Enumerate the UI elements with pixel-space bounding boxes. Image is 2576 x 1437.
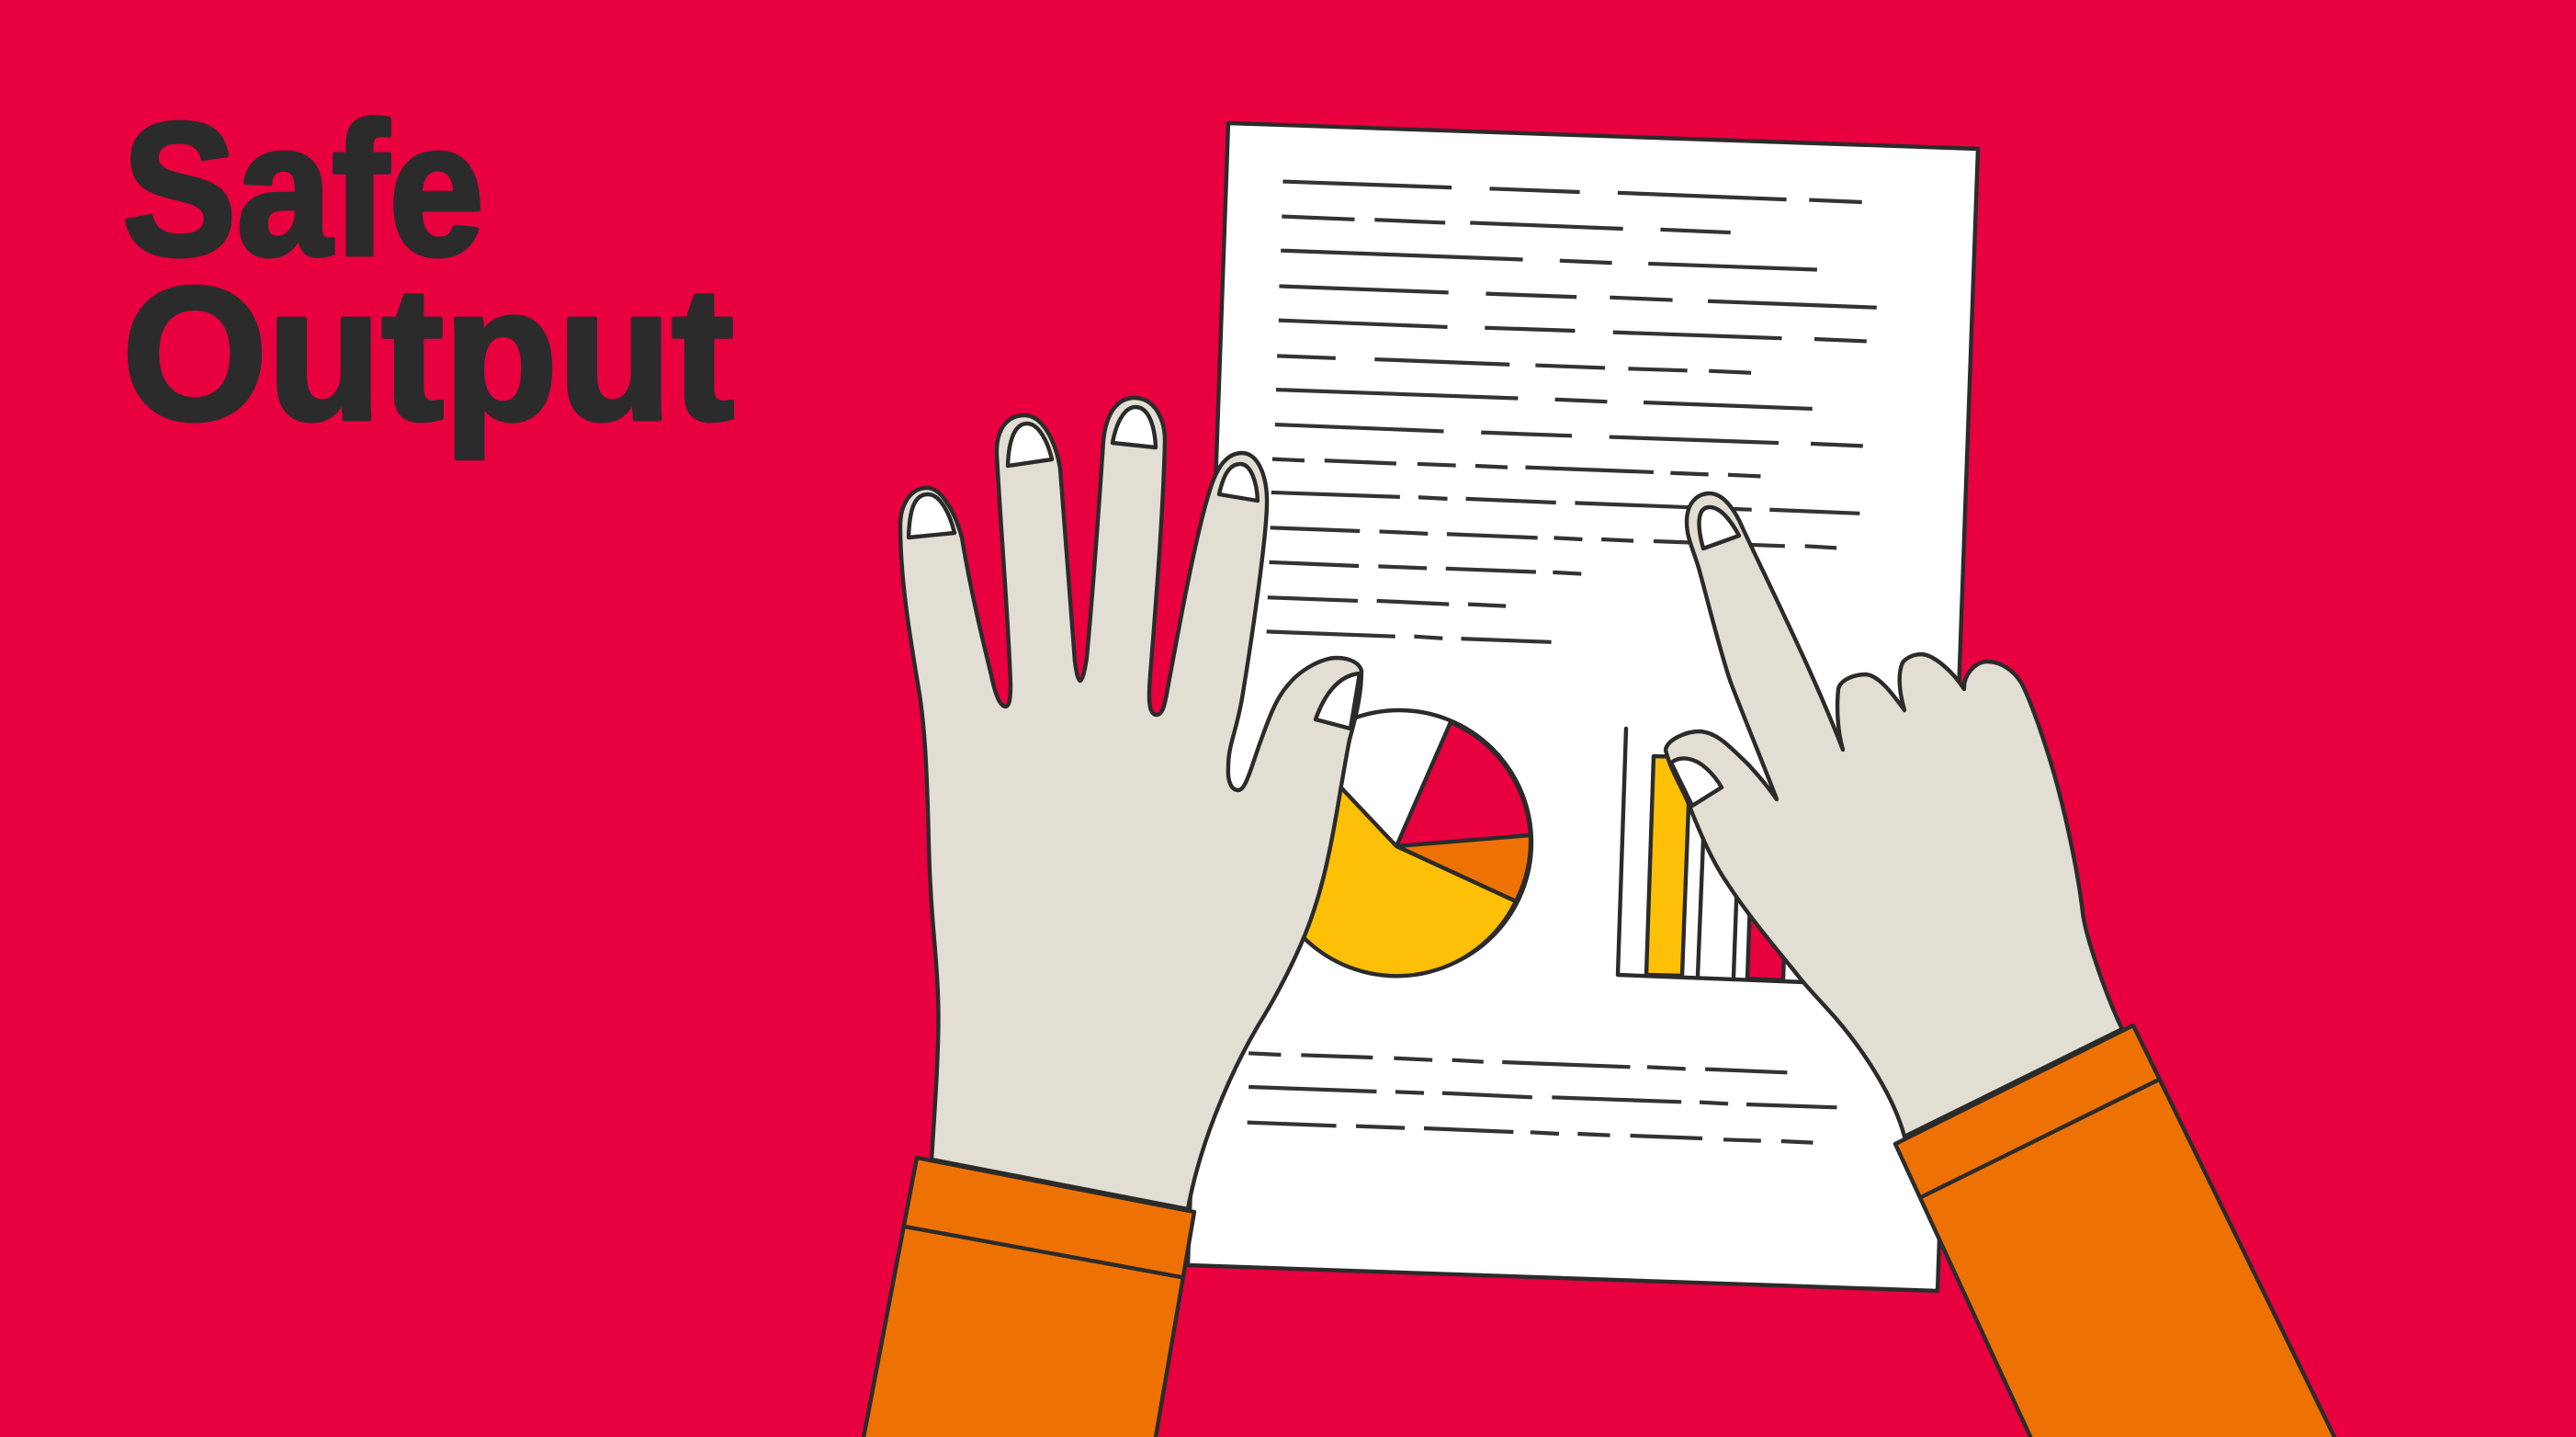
bar chart <box>1618 729 1805 982</box>
title: Output <box>122 248 734 459</box>
upper text lines <box>1267 182 1877 642</box>
nail: ring <box>1008 424 1052 466</box>
nail: right thumb <box>1671 758 1722 806</box>
left hand <box>900 398 1361 1209</box>
right hand <box>1666 493 2122 1137</box>
nail: pointing finger <box>1700 507 1739 549</box>
right sleeve <box>1895 1025 2337 1437</box>
nail: middle <box>1113 407 1156 447</box>
paper sheet <box>1188 123 1978 1291</box>
lower text lines <box>1248 1053 1836 1143</box>
nail: index <box>1219 464 1258 501</box>
left sleeve <box>863 1158 1194 1437</box>
title: Safe <box>122 84 484 295</box>
nail: pinky <box>909 494 955 537</box>
nail: thumb <box>1316 673 1360 729</box>
title <box>122 84 734 459</box>
pie chart <box>1264 710 1531 976</box>
